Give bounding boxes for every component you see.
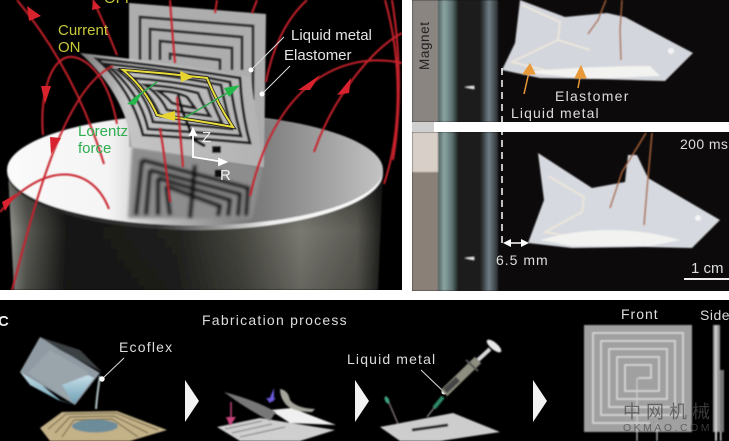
actuator sample (528, 133, 720, 248)
scale bar 1 cm (684, 263, 729, 280)
label: Current ON (58, 25, 108, 52)
callout: Elastomer: Elastomer (284, 47, 352, 64)
label: Magnet: Magnet (417, 21, 432, 70)
watermark: OKMAO.COM (623, 422, 712, 434)
displacement marker (503, 239, 529, 247)
red field line arrowheads (2, 0, 351, 211)
callout: Ecoflex (99, 339, 173, 382)
watermark: 中网机械 (623, 402, 715, 422)
panel: photo after 200 ms (412, 132, 729, 291)
watermark (623, 402, 715, 434)
callout: Liquid metal: Liquid metal (291, 27, 372, 44)
label: R: R (220, 167, 231, 184)
label: Liquid metal: Liquid metal (511, 105, 600, 121)
panel: magnet and coil illustration (0, 0, 402, 290)
strip between photos (412, 122, 434, 132)
cylindrical magnet (7, 114, 383, 290)
callout: Liquid metal (248, 27, 372, 72)
label: Elastomer: Elastomer (555, 88, 630, 104)
label: 200 ms: 200 ms (680, 136, 728, 152)
icon: beaker pouring Ecoflex (20, 337, 102, 409)
panel: fabrication process (0, 300, 729, 441)
arrow 1 (185, 380, 199, 422)
arrow 2 (355, 380, 369, 422)
red magnetic field lines (0, 0, 402, 290)
magnet edge strips (412, 0, 498, 122)
label: Z: Z (202, 129, 211, 146)
green Lorentz force arrows (127, 82, 240, 118)
icon: syringe injecting liquid metal (380, 338, 503, 441)
label: Liquid metal: Liquid metal (347, 351, 436, 367)
diagram: front view of spiral coil (584, 325, 692, 441)
arrow 3 (533, 380, 547, 422)
orange arrows (523, 64, 586, 94)
icon: mold with Ecoflex (40, 411, 167, 441)
reflection of the sheet in the magnet (128, 147, 263, 219)
icon: peeling and bonding films (217, 388, 336, 441)
label: Lorentz force: force (78, 140, 111, 157)
callout: Elastomer (260, 47, 352, 96)
diagram: side view (713, 325, 724, 441)
magnet edge strips (412, 132, 498, 291)
yellow current loop (123, 70, 233, 127)
panel: photo before actuation (412, 0, 729, 122)
actuator sample (502, 0, 693, 81)
scale bar 1 cm: 1 cm (691, 260, 724, 277)
callout line (421, 370, 446, 394)
axis arrows Z and R (190, 129, 226, 165)
label: Lorentz force (78, 126, 128, 153)
heading: Fabrication process: Fabrication process (202, 312, 348, 328)
label: Lorentz force: Lorentz (78, 123, 128, 140)
back of elastomer sheet (129, 3, 266, 167)
callout: Ecoflex: Ecoflex (119, 339, 173, 355)
label: 6.5 mm: 6.5 mm (496, 252, 549, 268)
label: Front: Front (621, 306, 659, 322)
reference dashed line (501, 68, 503, 243)
label: Current ON: ON (58, 39, 80, 56)
label: Current ON: Current (58, 22, 109, 39)
front curved sheet with coil (80, 53, 263, 177)
